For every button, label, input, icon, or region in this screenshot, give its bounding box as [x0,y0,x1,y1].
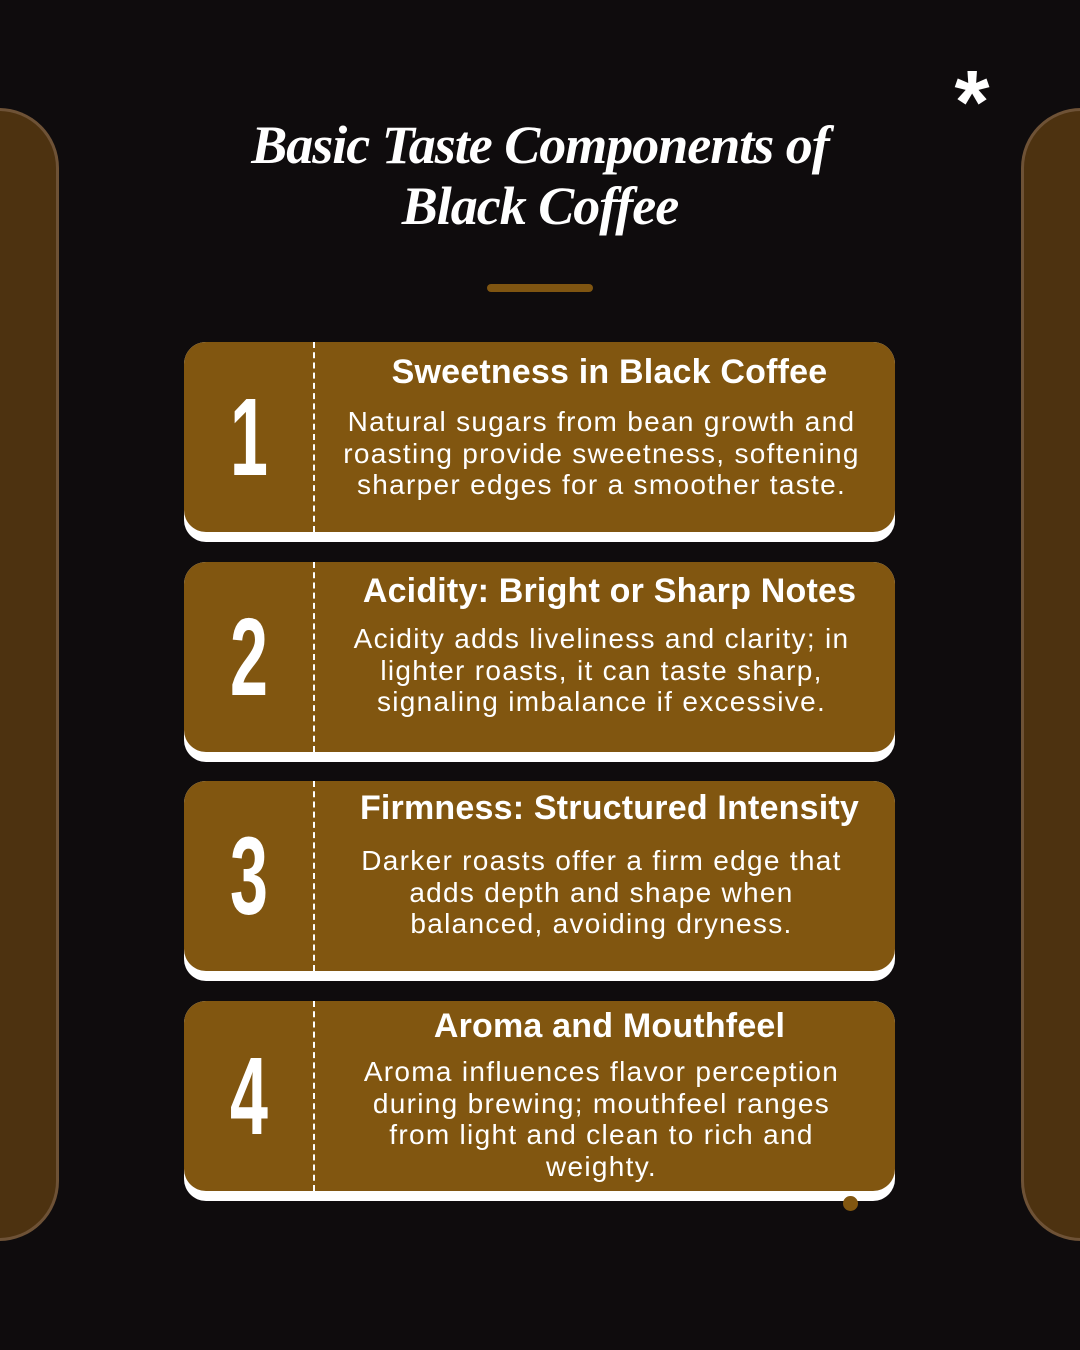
number 4: 4 [230,1034,268,1158]
left side pill [0,108,59,1241]
card 3 text: adds depth and shape when [409,876,794,908]
number 2: 2 [230,596,268,718]
number 1: 1 [230,376,268,498]
card 1 text: sharper edges for a smoother taste. [357,469,846,500]
right side pill [1021,108,1080,1241]
card 4 text: weighty. [546,1150,657,1182]
card 2 [184,562,895,762]
underline accent [487,284,593,292]
card 1 text: Sweetness in Black Coffee [392,353,827,391]
card 1 text: Natural sugars from bean growth and [348,406,855,437]
card 1 text: roasting provide sweetness, softening [343,438,860,468]
card 4 text: Aroma influences flavor perception [364,1056,839,1087]
number 3: 3 [230,814,268,938]
card 3 text: balanced, avoiding dryness. [410,908,793,939]
card 2 text: Acidity adds liveliness and clarity; in [354,623,849,654]
card 4 text: Aroma and Mouthfeel [434,1007,785,1045]
card 2 text: Acidity: Bright or Sharp Notes [363,572,856,610]
card 2 text [354,572,856,717]
card 4 text [364,1007,839,1182]
title: Basic Taste Components of [251,115,829,175]
card 3 text [360,789,859,939]
card 1 [184,342,895,542]
drip dot [843,1196,858,1211]
card 2 text: lighter roasts, it can taste sharp, [380,654,823,686]
card 2 text: signaling imbalance if excessive. [377,686,826,717]
card 3 [184,781,895,981]
card 4 [184,1001,895,1201]
card 3 text: Darker roasts offer a firm edge that [361,845,842,876]
title: Black Coffee [402,176,678,236]
card 3 text: Firmness: Structured Intensity [360,789,859,827]
card 4 text: from light and clean to rich and [389,1119,814,1150]
card 4 text: during brewing; mouthfeel ranges [373,1088,830,1118]
title [250,115,834,236]
icon: asterisk: * [954,53,990,153]
card 1 text [343,353,860,500]
